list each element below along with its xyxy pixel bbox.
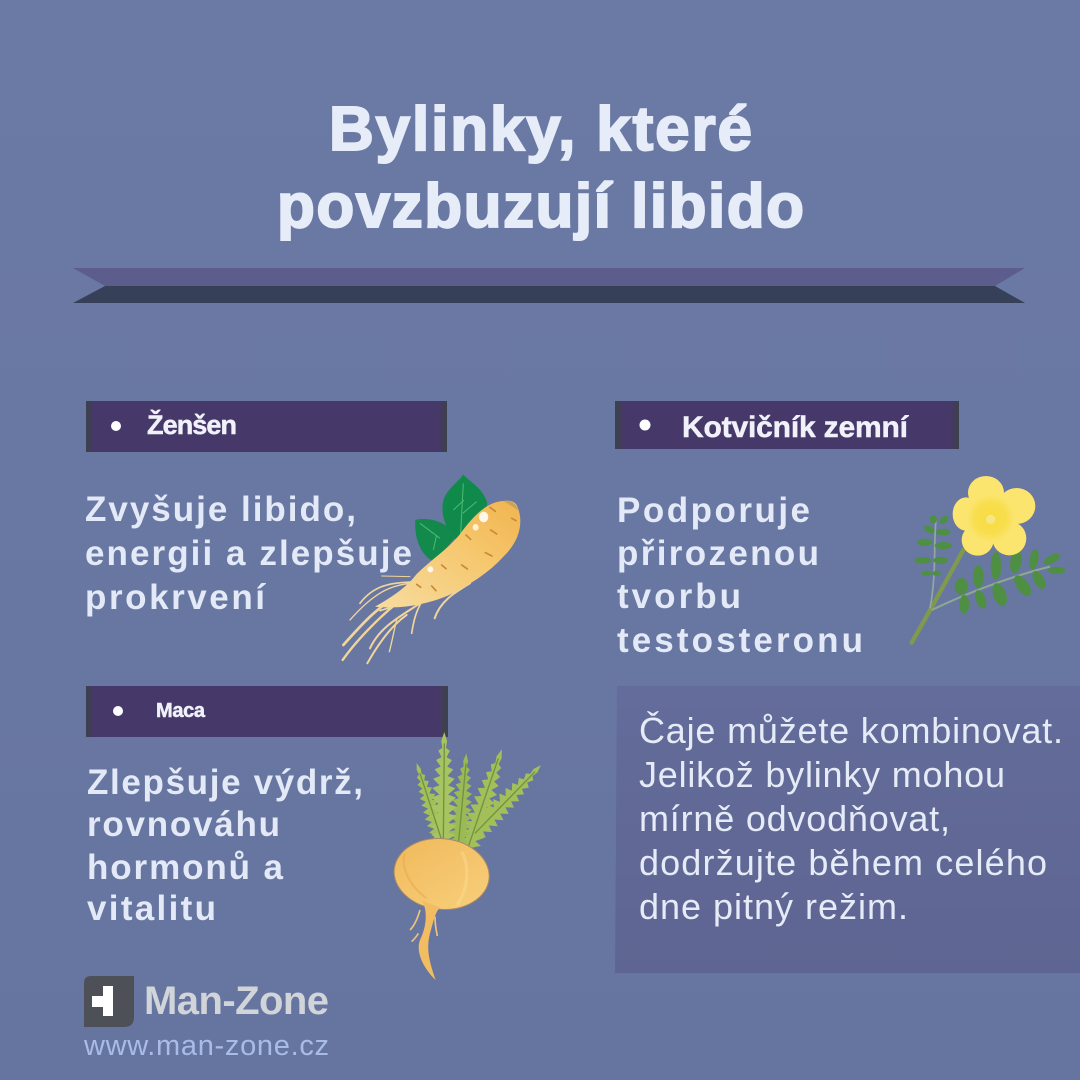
panel: kotvičník heading: Kotvičník zemní: [682, 411, 910, 444]
text: kotvičník benefits: testosteronu: [617, 621, 863, 660]
text: maca benefits: rovnováhu: [87, 805, 280, 844]
text: kotvičník benefits: [617, 491, 863, 660]
icon: maca root: [391, 732, 549, 980]
text: maca benefits: vitalitu: [87, 889, 216, 928]
text: maca benefits: [87, 763, 363, 928]
panel: maca heading: [86, 686, 448, 737]
panel: tea advice: Čaje můžete kombinovat.: [639, 710, 1063, 751]
text: ženšen benefits: Zvyšuje libido,: [85, 490, 356, 529]
panel: tea advice: dodržujte během celého: [639, 842, 1047, 883]
title: povzbuzují libido: [277, 172, 804, 241]
ribbon divider: [73, 268, 1025, 303]
title: [277, 95, 804, 241]
panel: tea advice: mírně odvodňovat,: [639, 798, 950, 839]
logo: Man-Zone: [84, 976, 329, 1027]
panel: ženšen heading: [86, 401, 447, 452]
logo: Man-Zone: Man-Zone: [144, 979, 329, 1023]
panel: tea advice: dne pitný režim.: [639, 886, 908, 927]
text: kotvičník benefits: přirozenou: [617, 534, 819, 573]
panel: kotvičník heading: [615, 401, 959, 449]
text: maca benefits: hormonů a: [87, 848, 284, 887]
text: ženšen benefits: [85, 490, 412, 617]
text: kotvičník benefits: tvorbu: [617, 577, 741, 616]
text: ženšen benefits: prokrvení: [85, 578, 266, 617]
panel: maca heading: Maca: [156, 700, 206, 722]
text: ženšen benefits: energii a zlepšuje: [85, 534, 412, 573]
icon: yellow flower with leaves: [912, 476, 1066, 643]
panel: ženšen heading: Ženšen: [147, 409, 237, 440]
text: kotvičník benefits: Podporuje: [617, 491, 810, 530]
text: website: www.man-zone.cz: [83, 1030, 329, 1062]
text: maca benefits: Zlepšuje výdrž,: [87, 763, 363, 802]
title: Bylinky, které: [329, 95, 752, 164]
panel: tea advice: [615, 686, 1080, 973]
icon: ginseng root: [343, 475, 520, 663]
panel: tea advice: Jelikož bylinky mohou: [639, 754, 1005, 795]
